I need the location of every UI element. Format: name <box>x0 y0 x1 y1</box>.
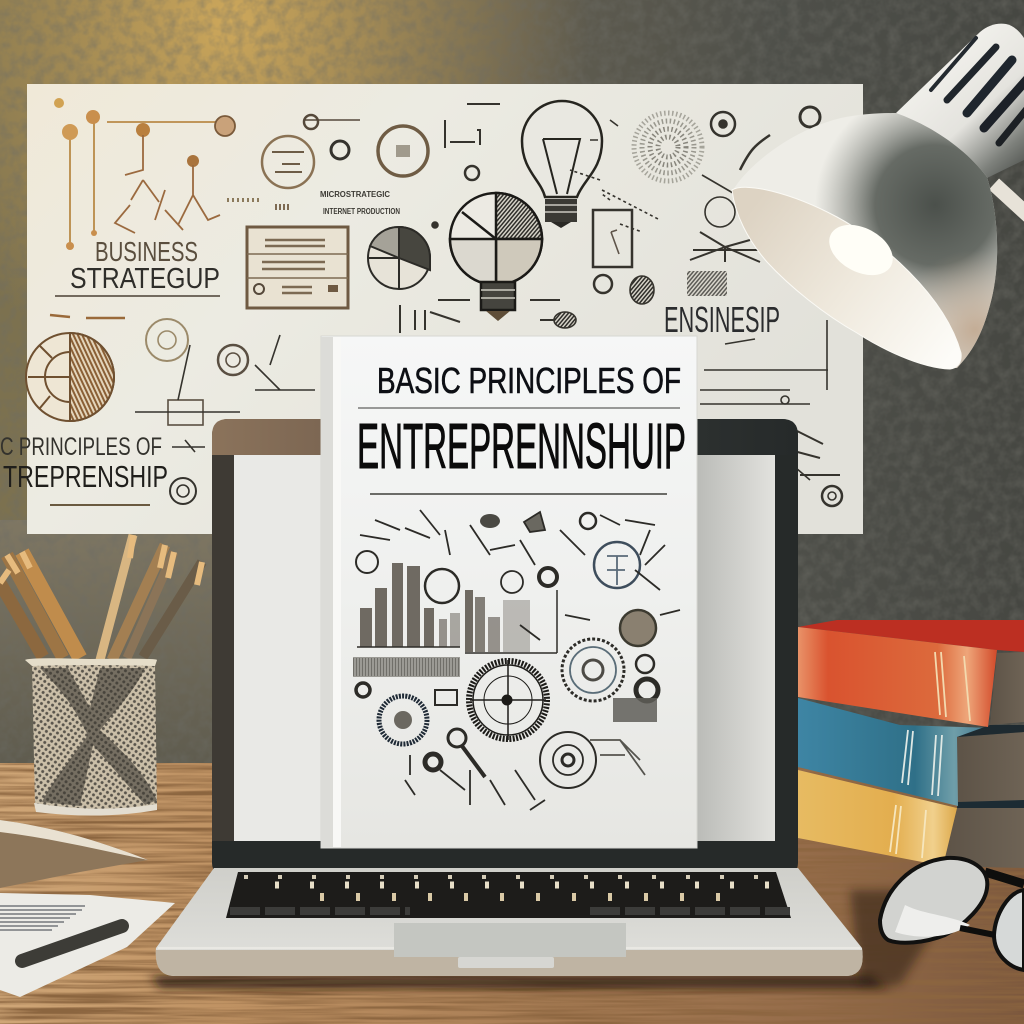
open papers and pen <box>0 820 175 997</box>
laptop screen <box>234 455 775 841</box>
icon: small pie chart <box>368 227 430 289</box>
laptop lid <box>212 419 798 879</box>
icon: pie chart bulb <box>450 193 542 321</box>
poster text: ensinesip: ENSINESIP <box>664 299 780 340</box>
lamp bulb <box>821 215 901 285</box>
lamp neck with vents <box>896 24 1024 178</box>
icon: striped sphere <box>26 333 114 421</box>
poster heading: strategup: STRATEGUP <box>70 263 220 295</box>
lamp <box>732 24 1024 369</box>
orange flower doodles <box>50 98 289 505</box>
poster doodles <box>135 104 842 506</box>
poster text: entrepreneurship: TREPRENSHIP <box>3 459 168 494</box>
icon: large lightbulb <box>522 101 602 228</box>
mesh cup <box>32 665 157 810</box>
book: blue <box>798 698 1024 808</box>
book cover <box>321 336 697 848</box>
poster heading: business: BUSINESS <box>95 236 198 267</box>
book subtitle: ENTREPRENNSHUIP <box>357 410 686 482</box>
poster: business sketches <box>0 84 863 534</box>
icon: dashboard panel <box>247 227 348 308</box>
poster tiny labels <box>320 190 400 216</box>
book doodles <box>356 510 680 810</box>
target gear <box>469 660 547 740</box>
lamp arm <box>994 184 1024 217</box>
keyboard <box>226 872 791 918</box>
poster text: principles: C PRINCIPLES OF <box>0 433 162 461</box>
wall background <box>0 0 1024 770</box>
book: red <box>798 620 1024 737</box>
lamp shade interior <box>732 187 961 369</box>
skyline drawing <box>353 563 557 677</box>
wooden desk <box>0 763 1024 1024</box>
stacked books <box>798 620 1024 868</box>
icon: halftone circle <box>634 113 702 181</box>
reading glasses <box>880 858 1024 970</box>
laptop <box>156 419 863 976</box>
book title: BASIC PRINCIPLES OF <box>377 360 681 401</box>
pencil holder <box>0 535 202 816</box>
poster tiny labels: MICROSTRATEGIC <box>320 190 390 199</box>
lamp shade <box>732 113 997 368</box>
pen <box>22 926 122 961</box>
laptop base <box>156 868 863 976</box>
poster tiny labels: INTERNET PRODUCTION <box>323 207 400 216</box>
trackpad <box>394 923 626 957</box>
pencils <box>0 535 202 660</box>
book: yellow <box>798 770 1024 868</box>
